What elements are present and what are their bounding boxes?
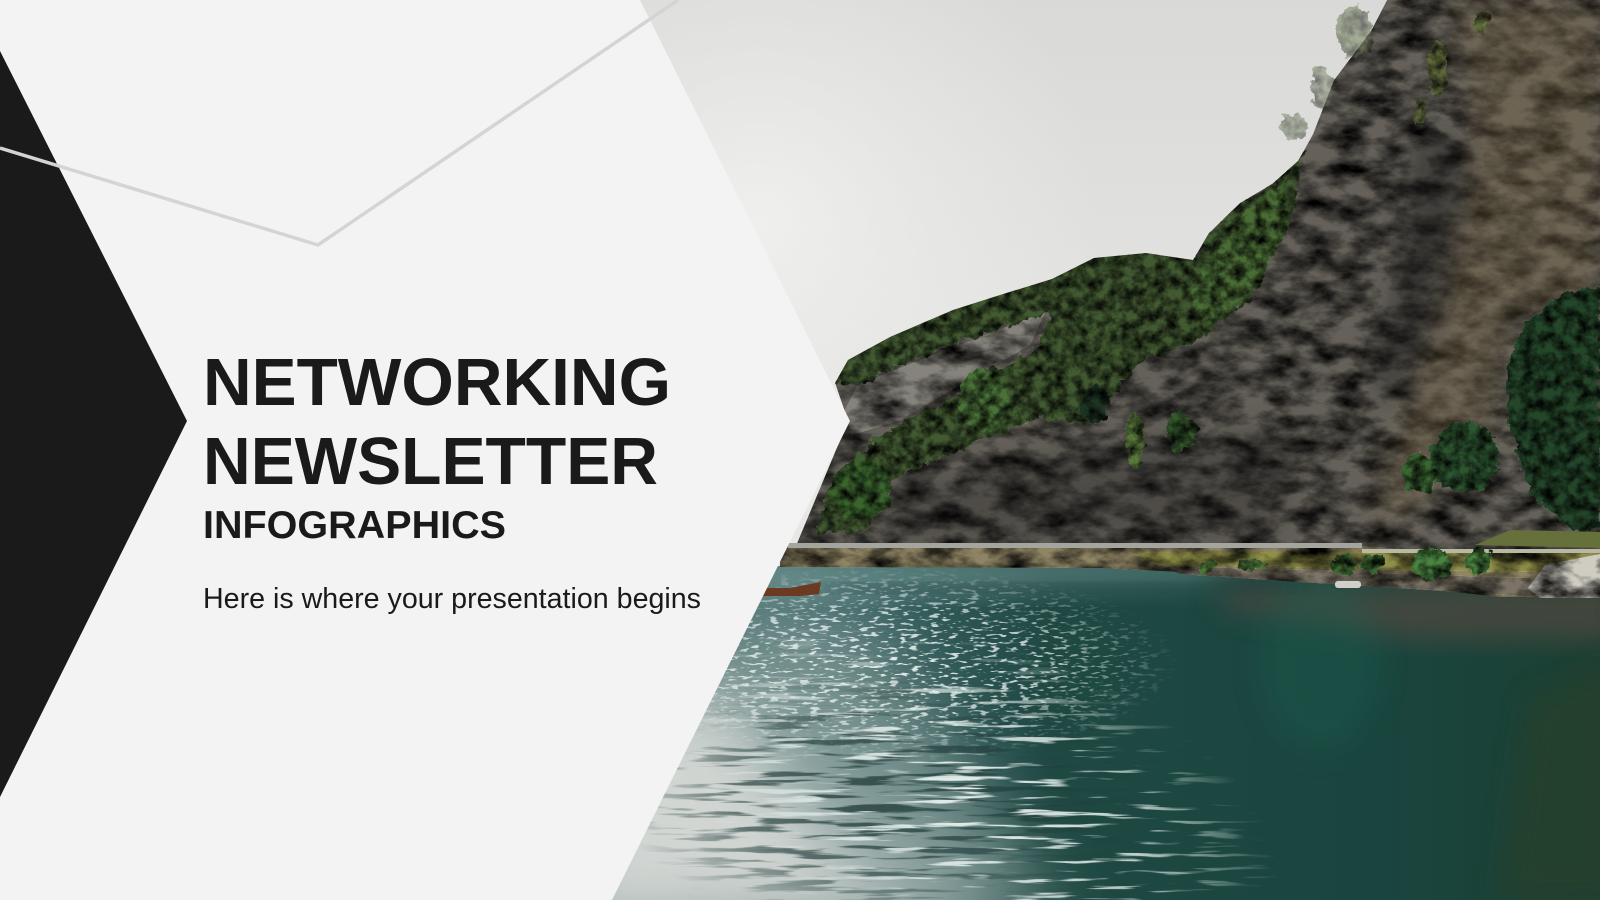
bushes on the right [1402,285,1600,530]
photo: lake and cliff [560,0,1600,900]
panel: white arrow shape [0,0,850,900]
panel: black arrow shape [0,51,187,797]
title: NETWORKING [203,345,671,420]
title [203,345,671,499]
trees on the cliff top [1281,6,1373,137]
sky [620,0,1600,600]
water [560,560,1600,900]
tagline: Here is where your presentation begins [203,583,701,615]
shore with road rail [780,530,1600,598]
decorative outline line [0,0,678,245]
reflection of cliff in water [1210,585,1600,640]
moss on the rock [1414,11,1489,126]
forest on the slope [815,150,1305,535]
title: NEWSLETTER [203,424,658,499]
subtitle: INFOGRAPHICS [203,504,506,547]
cliff: rock wall [795,0,1600,552]
boat [760,582,821,596]
